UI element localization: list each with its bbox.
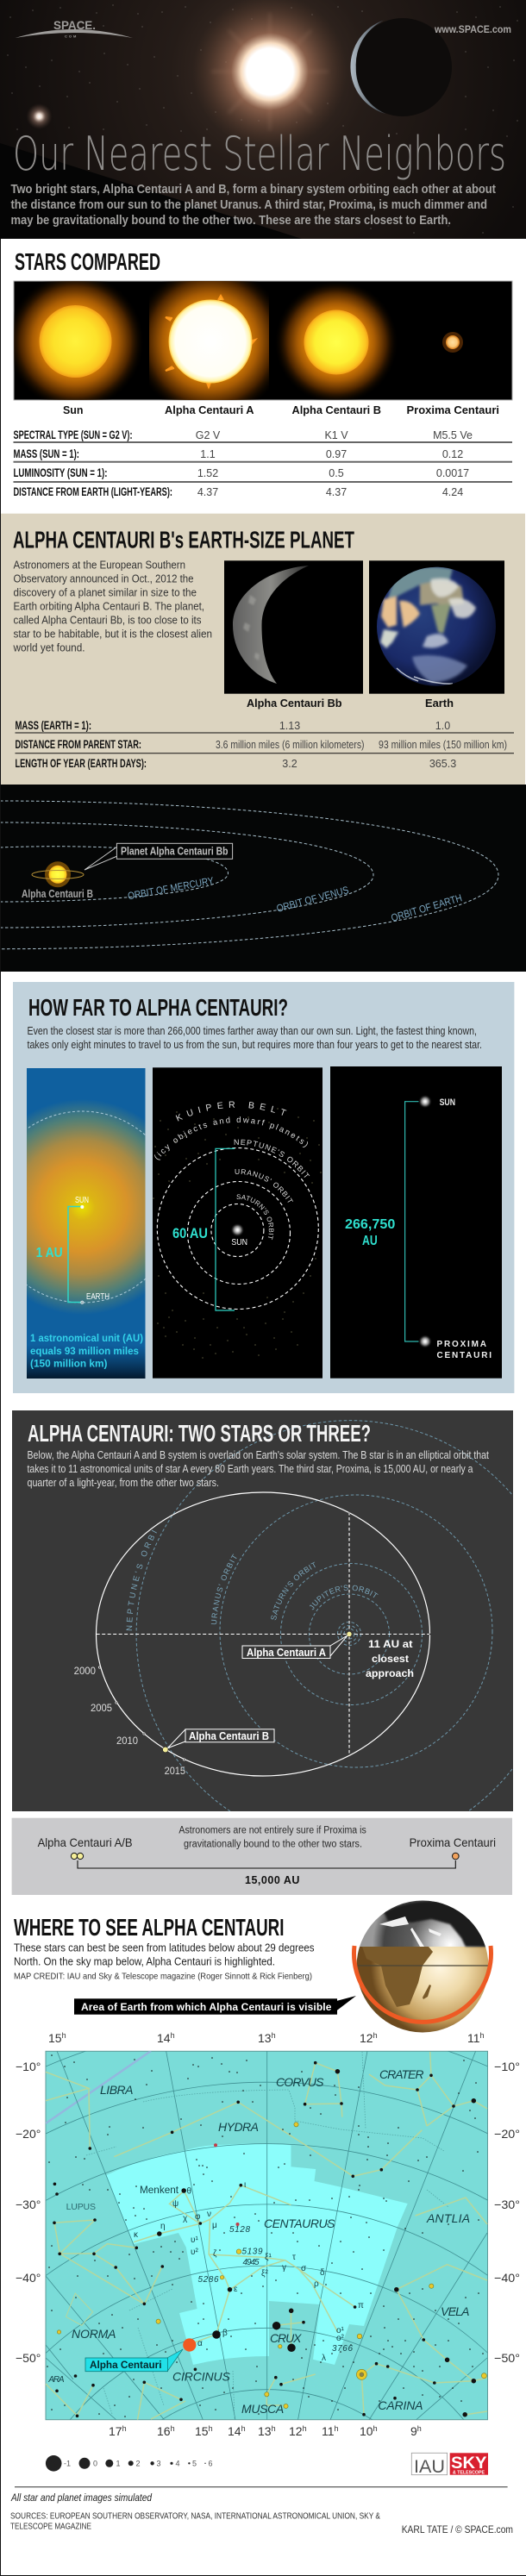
map grid labels: bottom hours: 9	[410, 2424, 417, 2438]
comparison table: SPECTRAL TYPE (SUN = G2 V):	[14, 428, 133, 441]
star designations: ο²	[336, 2334, 345, 2343]
star: Sun	[14, 281, 140, 400]
header banner	[0, 0, 526, 239]
planet table: 365.3	[429, 758, 456, 770]
star A	[347, 1631, 352, 1636]
planet table: 3.2	[282, 758, 297, 770]
callout: Alpha Centauri	[85, 2349, 183, 2372]
planet table	[16, 719, 514, 770]
magnitude legend: 1	[116, 2459, 121, 2467]
comparison table: G2 V	[196, 429, 221, 441]
site url: www.SPACE.com	[434, 23, 511, 35]
globe	[354, 1900, 492, 2033]
heading: stars compared: STARS COMPARED	[15, 248, 160, 275]
visibility label: Area of Earth from which Alpha Centauri is visible	[81, 2001, 332, 2013]
panel: how far to Alpha Centauri	[13, 982, 514, 1393]
comparison table: 1.52	[197, 467, 218, 479]
year markers	[74, 1635, 430, 1777]
1 AU note: 1 astronomical unit (AU)	[30, 1334, 143, 1344]
map grid labels: bottom hours: 16	[157, 2424, 171, 2438]
1 AU note	[30, 1334, 143, 1369]
map grid labels: declination: −50°	[16, 2351, 41, 2365]
star designations: λ	[322, 2354, 326, 2363]
declination and RA grid	[46, 2051, 488, 2420]
star designations: 5128	[229, 2225, 250, 2235]
Proxima note: gravitationally bound to the other two stars.	[184, 1840, 362, 1850]
constellation names: HYDRA	[218, 2120, 260, 2134]
planet description: Astronomers at the European Southern	[14, 559, 185, 571]
logo: Sky and Telescope: SKY	[451, 2454, 487, 2473]
comparison table: MASS (SUN = 1):	[14, 447, 79, 460]
visibility label	[74, 1996, 356, 2015]
map grid labels: bottom hours: h	[122, 2424, 127, 2433]
star designations: π	[358, 2301, 364, 2310]
star images	[14, 281, 512, 400]
sun	[230, 1223, 244, 1237]
closest approach label: closest	[372, 1653, 409, 1665]
bright stars	[160, 2072, 473, 2415]
planet name labels	[247, 697, 454, 710]
constellation names: VELA	[441, 2304, 471, 2318]
label: Proxima Centauri: Proxima Centauri	[410, 1835, 496, 1849]
callout: Alpha Centauri A: Alpha Centauri A	[247, 1647, 326, 1659]
chart: 1 AU	[27, 1068, 145, 1379]
panel: where to see	[14, 1900, 492, 2033]
constellation names: LIBRA	[100, 2083, 135, 2097]
image: Earth	[369, 560, 504, 694]
star designations: 5286	[198, 2275, 219, 2285]
planet description: Earth orbiting Alpha Centauri B. The planet,	[14, 600, 204, 612]
magnitude legend: 6	[209, 2459, 213, 2467]
map grid labels: declination: −20°	[494, 2127, 520, 2141]
map grid labels: bottom hours: h	[209, 2424, 213, 2433]
map grid labels: bottom hours: h	[171, 2424, 175, 2433]
magnitude legend: -1	[64, 2459, 71, 2467]
star designations: υ²	[191, 2248, 198, 2257]
star designations: 5139	[241, 2247, 263, 2257]
star designations: χ	[183, 2214, 188, 2223]
intro text: may be gravitationally bound to the other two. These are the stars closest to Earth.	[10, 214, 451, 228]
chart: 266,750 AU: CENTAURI	[436, 1351, 492, 1360]
map grid labels: bottom hours: h	[241, 2424, 246, 2433]
curved orbit labels: (icy objects and dwarf planets)	[154, 1116, 308, 1160]
constellation names: CIRCINUS	[172, 2370, 231, 2384]
magnitude legend: 0	[93, 2459, 97, 2467]
map grid labels: bottom hours: h	[272, 2424, 276, 2433]
comparison table: DISTANCE FROM EARTH (LIGHT-YEARS):	[14, 485, 172, 498]
visibility arc	[354, 1946, 492, 2022]
1 AU bracket	[68, 1207, 82, 1302]
panel: two stars or three	[12, 1410, 513, 1811]
comparison table: 4.24	[442, 486, 463, 498]
map grid labels: bottom hours: h	[335, 2424, 339, 2433]
panel: stars compared	[7, 248, 512, 498]
map grid labels: declination: −50°	[494, 2351, 520, 2365]
star designations: ο¹	[336, 2326, 345, 2335]
map grid labels: top hours: 11	[467, 2031, 480, 2045]
closest approach line	[97, 1633, 430, 1635]
map grid labels: top hours: h	[272, 2031, 276, 2040]
map grid labels: bottom hours: 17	[109, 2424, 122, 2438]
star designations: ν	[207, 2210, 211, 2219]
map grid labels: top hours: h	[171, 2031, 175, 2040]
logo: SPACE.com	[16, 19, 133, 38]
star: Alpha Centauri B	[279, 281, 394, 400]
planet name labels: Earth	[425, 697, 454, 710]
star designations: κ	[134, 2230, 139, 2240]
chart: 266,750 AU: PROXIMA	[436, 1340, 486, 1349]
callout: Planet Alpha Centauri Bb	[85, 843, 233, 870]
planet description: called Alpha Centauri Bb, is too close to its	[14, 614, 202, 626]
map grid labels: bottom hours: 14	[228, 2424, 241, 2438]
comparison table: M5.5 Ve	[433, 429, 473, 441]
map grid labels: top hours: 13	[258, 2031, 272, 2045]
map grid labels: bottom hours: 10	[360, 2424, 373, 2438]
chart: 1 AU: 1 AU	[36, 1246, 63, 1260]
constellation names: CARINA	[378, 2398, 424, 2412]
constellation lines	[46, 2052, 487, 2420]
curved orbit labels: SATURN'S ORBIT	[271, 1562, 316, 1621]
orbit of star B	[97, 1492, 429, 1776]
curved orbit labels: SATURN'S ORBIT	[236, 1194, 274, 1240]
constellation names: LUPUS	[66, 2202, 96, 2212]
constellation names: MUSCA	[241, 2402, 285, 2416]
map grid labels: declination: −10°	[16, 2060, 41, 2073]
map background	[46, 2051, 488, 2420]
curved orbit labels: URANUS' ORBIT	[235, 1169, 293, 1203]
star designations: μ	[212, 2221, 217, 2230]
comparison table: 0.97	[326, 448, 347, 460]
where to see description: North. On the sky map below, Alpha Centauri is highlighted.	[14, 1955, 275, 1967]
chart: 1 AU: EARTH	[86, 1292, 110, 1302]
comparison table: 0.12	[442, 448, 463, 460]
planet table: 1.13	[279, 720, 300, 732]
star designations: β	[222, 2329, 228, 2338]
chart: 1 AU: SUN	[75, 1196, 89, 1205]
planet description: discovery of a planet similar in size to the	[14, 586, 197, 598]
closest approach label	[366, 1638, 414, 1679]
orbit labels: ORBIT OF VENUS	[275, 884, 350, 915]
star dots	[71, 1853, 459, 1860]
two stars description: quarter of a light-year, from the other two stars.	[28, 1477, 219, 1489]
constellation boundaries	[86, 2052, 448, 2419]
planet description: Observatory announced in Oct., 2012 the	[14, 572, 194, 585]
comparison table: 1.1	[200, 448, 216, 460]
comparison table: LUMINOSITY (SUN = 1):	[14, 466, 107, 479]
star name labels: Sun	[63, 403, 84, 416]
curved orbit labels: NEPTUNE'S ORBIT	[235, 1140, 310, 1178]
curved orbit labels: KUIPER BELT	[176, 1102, 286, 1121]
curved orbit labels: URANUS' ORBIT	[210, 1554, 236, 1624]
sky map	[16, 2021, 520, 2454]
chart: 266,750 AU: 266,750	[345, 1217, 395, 1232]
logo: SPACE.com: COM	[65, 34, 78, 38]
year markers: 2005	[91, 1702, 112, 1714]
star designations: α	[197, 2339, 203, 2348]
orbit of Venus	[0, 822, 373, 928]
chart: 266,750 AU: SUN	[440, 1097, 455, 1108]
comparison table: 0.0017	[436, 467, 469, 479]
Kuiper belt dots	[153, 1109, 321, 1358]
chart: 266,750 AU: AU	[362, 1234, 378, 1248]
callout: Planet Alpha Centauri Bb: Planet Alpha Centauri Bb	[121, 845, 229, 857]
equator line	[356, 1965, 488, 1966]
planet table: 3.6 million miles (6 million kilometers)	[216, 739, 364, 751]
heading: how far: HOW FAR TO ALPHA CENTAURI?	[28, 994, 288, 1021]
label: Alpha Centauri A/B: Alpha Centauri A/B	[38, 1835, 133, 1849]
map grid labels: declination: −20°	[16, 2127, 41, 2141]
star name labels	[63, 403, 499, 416]
planet name labels: Alpha Centauri Bb	[247, 697, 342, 710]
dark planet	[350, 18, 452, 116]
planet description: star to be habitable, but it is the closest alien	[14, 628, 212, 640]
magnitude legend: 5	[192, 2459, 197, 2467]
image: Alpha Centauri Bb crescent	[224, 560, 363, 694]
closest approach label: 11 AU at	[368, 1638, 412, 1650]
chart: 266,750 AU	[330, 1066, 502, 1379]
map grid labels: bottom hours: h	[303, 2424, 307, 2433]
curved orbit labels	[154, 1102, 310, 1240]
star: Proxima Centauri	[442, 332, 463, 353]
map grid labels: top hours: h	[480, 2031, 485, 2040]
star designations: υ¹	[191, 2235, 198, 2245]
star designations: Menkent	[140, 2185, 179, 2196]
panel: inner orbits diagram	[0, 785, 526, 972]
solar system orbits	[136, 1421, 513, 1811]
bright star	[192, 0, 348, 149]
magnitude legend	[46, 2455, 213, 2472]
star name labels: Alpha Centauri A	[165, 403, 254, 416]
magnitude legend: 4	[176, 2459, 180, 2467]
star designations: 3766	[332, 2344, 353, 2354]
panel: earth-size planet	[1, 514, 525, 785]
comparison table	[14, 428, 512, 498]
sources: TELESCOPE MAGAZINE	[10, 2521, 91, 2531]
logo: SPACE.com: SPACE.	[53, 19, 96, 32]
map grid labels: bottom hours: h	[373, 2424, 378, 2433]
star flare spikes	[211, 13, 329, 130]
map grid labels: top hours	[48, 2031, 485, 2045]
map grid labels: declination: −40°	[16, 2271, 41, 2285]
heading: earth-size planet: ALPHA CENTAURI B's EARTH-SIZE PLANET	[13, 527, 354, 553]
60 AU bracket	[216, 1148, 235, 1310]
star name labels: Proxima Centauri	[407, 403, 499, 416]
intro text	[10, 183, 496, 228]
map grid labels: declination	[16, 2060, 520, 2365]
constellation names: ANTLIA	[426, 2211, 472, 2225]
panel: Proxima distance	[12, 1818, 512, 1895]
star B	[163, 1747, 168, 1753]
star designations: θ	[186, 2186, 191, 2197]
1 AU note: (150 million km)	[30, 1359, 108, 1369]
map grid labels: declination: −30°	[494, 2198, 520, 2211]
logo: IAU: IAU	[414, 2457, 445, 2477]
curved orbit labels: NEPTUNE'S ORBIT	[126, 1529, 157, 1631]
Proxima note: Astronomers are not entirely sure if Proxima is	[178, 1826, 366, 1836]
star designations: ε	[234, 2285, 238, 2294]
star designations: η	[160, 2222, 166, 2231]
constellation names: ARA	[47, 2375, 66, 2385]
constellation names: CENTAURUS	[264, 2216, 336, 2230]
distance bracket	[78, 1860, 455, 1868]
Africa	[362, 1947, 433, 2007]
Alpha Centauri star	[183, 2338, 196, 2352]
star designations: 4945	[243, 2258, 260, 2267]
map grid labels: top hours: 12	[360, 2031, 373, 2045]
star designations: ζ	[213, 2249, 217, 2259]
minor axis line	[348, 1512, 350, 1754]
star designations	[134, 2180, 364, 2363]
map grid labels: top hours: h	[373, 2031, 378, 2040]
star: Alpha Centauri B	[32, 861, 84, 887]
year markers: 2010	[116, 1735, 138, 1747]
distance label: 15,000 AU	[245, 1874, 299, 1886]
closest approach label: approach	[366, 1667, 414, 1679]
orbit labels	[127, 874, 463, 924]
red nebulae	[216, 2145, 238, 2224]
star designations: ξ²	[261, 2269, 268, 2279]
Earth orbit	[27, 1110, 145, 1304]
planet table: LENGTH OF YEAR (EARTH DAYS):	[16, 757, 147, 770]
comparison table: 4.37	[197, 486, 218, 498]
map grid labels: declination: −40°	[494, 2271, 520, 2285]
magnitude legend: 2	[136, 2459, 141, 2467]
chart: 60 AU solar system: 60 AU	[172, 1225, 208, 1241]
map grid labels: bottom hours: h	[417, 2424, 422, 2433]
map grid labels: bottom hours: 11	[322, 2424, 335, 2438]
constellation names: CRATER	[379, 2067, 425, 2081]
small distant star	[26, 103, 52, 129]
map grid labels: bottom hours: 15	[195, 2424, 209, 2438]
star clusters	[57, 2123, 486, 2409]
footer	[10, 2487, 513, 2535]
star designations: σ	[301, 2264, 307, 2273]
medium stars	[54, 2063, 454, 2416]
curved orbit labels: JUPITER'S ORBIT	[309, 1585, 378, 1610]
callout: Alpha Centauri B	[167, 1729, 274, 1748]
where to see description	[14, 1941, 315, 1967]
chart: 60 AU solar system: SUN	[231, 1237, 247, 1247]
map grid labels: bottom hours	[109, 2424, 422, 2438]
land above visible line	[379, 1901, 490, 1947]
curved orbit labels	[126, 1529, 378, 1631]
star designations: τ	[292, 2253, 296, 2262]
simulated note: All star and planet images simulated	[10, 2492, 152, 2504]
map credit: MAP CREDIT: IAU and Sky & Telescope magazine (Roger Sinnott & Rick Fienberg)	[14, 1971, 312, 1981]
magnitude legend: 3	[157, 2459, 161, 2467]
star designations: δ	[320, 2268, 325, 2278]
header star field	[8, 5, 517, 233]
callout: Alpha Centauri B: Alpha Centauri B	[189, 1730, 269, 1742]
map grid labels: bottom hours: 12	[289, 2424, 303, 2438]
comparison table: 0.5	[329, 467, 344, 479]
callout: Alpha Centauri A	[242, 1635, 348, 1659]
orbit of Mercury	[0, 847, 229, 902]
map grid labels: bottom hours: 13	[258, 2424, 272, 2438]
comparison table: 4.37	[326, 486, 347, 498]
heading: where to see: WHERE TO SEE ALPHA CENTAURI	[14, 1914, 285, 1941]
map grid labels: declination: −10°	[494, 2060, 520, 2073]
year markers: 2015	[165, 1765, 185, 1777]
planet table: DISTANCE FROM PARENT STAR:	[16, 738, 141, 751]
star designations: ρ	[314, 2279, 319, 2289]
map grid labels: top hours: 15	[48, 2031, 62, 2045]
star designations: ξ¹	[265, 2253, 272, 2262]
orbit labels: ORBIT OF MERCURY	[127, 874, 215, 902]
planet table: MASS (EARTH = 1):	[16, 719, 91, 732]
star designations: φ	[195, 2212, 201, 2222]
constellation names: NORMA	[72, 2327, 117, 2341]
constellation names: CRUX	[270, 2331, 303, 2345]
comparison table: K1 V	[324, 429, 348, 441]
orbit of Earth	[0, 801, 498, 949]
star name labels: Alpha Centauri B	[291, 403, 381, 416]
label: Alpha Centauri B: Alpha Centauri B	[22, 887, 93, 900]
how far description	[28, 1025, 482, 1051]
callout: Alpha Centauri: Alpha Centauri	[90, 2359, 162, 2371]
two stars description	[28, 1449, 489, 1489]
where to see description: These stars can best be seen from latitudes below about 29 degrees	[14, 1941, 315, 1954]
constellation names	[47, 2067, 472, 2416]
map grid labels: top hours: h	[62, 2031, 66, 2040]
star designations: γ	[282, 2263, 286, 2273]
small stars	[47, 2050, 483, 2417]
year markers: 2000	[74, 1665, 96, 1677]
chart: 60 AU solar system	[153, 1067, 322, 1379]
ecliptic band	[46, 2051, 151, 2123]
map grid labels: declination: −30°	[16, 2198, 41, 2211]
planet table: 1.0	[435, 720, 450, 732]
logo: Sky and Telescope: & TELESCOPE	[453, 2471, 485, 2476]
planet description: world yet found.	[13, 641, 85, 653]
map grid labels: top hours: 14	[157, 2031, 171, 2045]
star: Alpha Centauri A	[149, 281, 269, 400]
orbit labels: ORBIT OF EARTH	[390, 891, 463, 924]
sources: SOURCES: EUROPEAN SOUTHERN OBSERVATORY, NASA, INTERNATIONAL ASTRONOMICAL UNION, SKY &	[10, 2510, 380, 2521]
planet description	[13, 559, 212, 653]
sources	[10, 2510, 380, 2531]
Proxima note	[178, 1826, 366, 1850]
Centaurus highlight	[106, 2144, 408, 2365]
planet orbits	[157, 1148, 318, 1309]
star designations: ι	[244, 2180, 246, 2190]
star designations: ψ	[172, 2199, 178, 2209]
constellation names: CORVUS	[276, 2075, 325, 2089]
1 AU note: equals 93 million miles	[30, 1347, 139, 1357]
